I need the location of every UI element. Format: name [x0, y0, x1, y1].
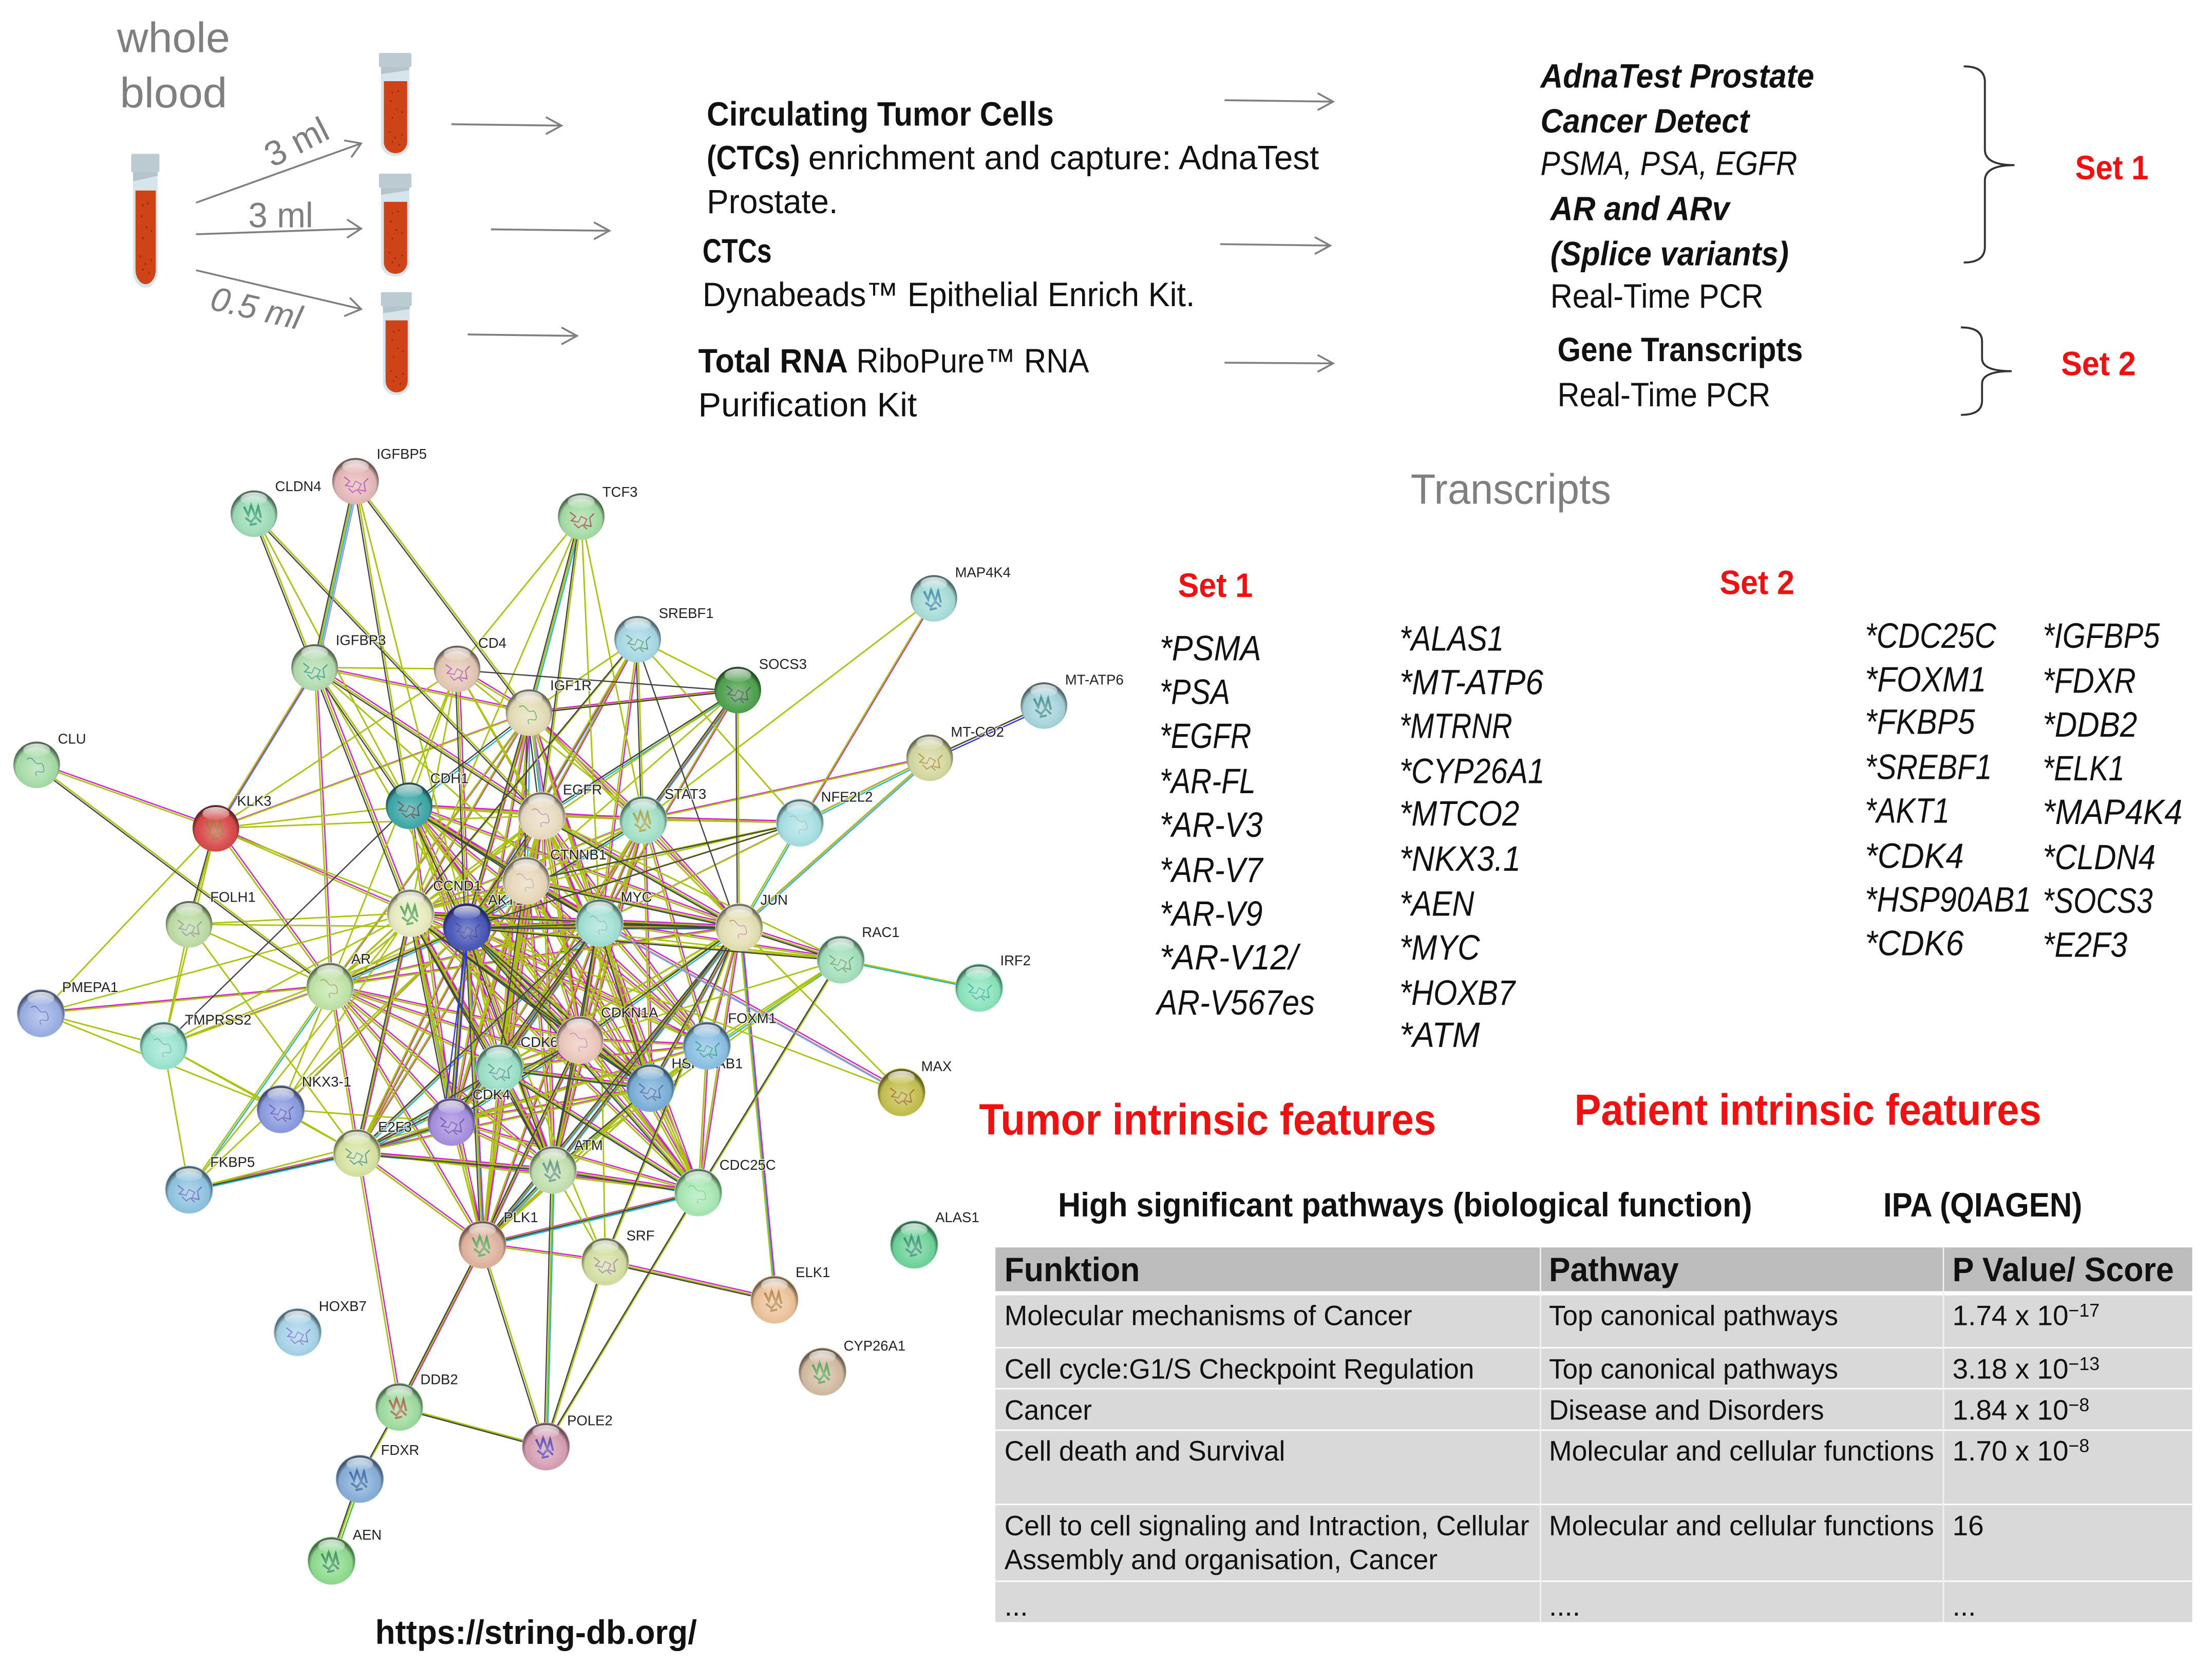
table column: function: Cell death and Survival: [1005, 1435, 1285, 1467]
node: TMPRSS2: TMPRSS2: [185, 1012, 252, 1027]
node: CDK6: CDK6: [521, 1034, 558, 1050]
text block: enrichment methods: Total RNA: [698, 342, 848, 380]
arrow: Dynabeads to PCR: [1220, 237, 1330, 254]
node: CLDN4: [231, 478, 322, 537]
table column: function: [1005, 1299, 1529, 1622]
node: RAC1: [817, 924, 900, 984]
table column: pathway: ....: [1549, 1590, 1580, 1622]
node: MYC: [576, 889, 652, 947]
list: set 2 transcripts column 1: *MTRNR: [1400, 706, 1513, 746]
list: set 2 transcripts column 1: [1400, 619, 1545, 1055]
node: FKBP5: FKBP5: [210, 1154, 255, 1170]
table column: function: Cell to cell signaling and Intraction, Cellular: [1005, 1510, 1529, 1542]
table column: function: ...: [1005, 1590, 1028, 1622]
list: set 2 transcripts column 1: *HOXB7: [1400, 973, 1517, 1013]
node: KLK3: [193, 793, 272, 852]
node: SREBF1: SREBF1: [659, 605, 714, 621]
node: CDK4: CDK4: [472, 1087, 510, 1102]
list: set 1 transcripts: *PSMA: [1160, 629, 1261, 668]
list: set 2 transcripts column 2: *CDK6: [1865, 924, 1964, 963]
list: set 1 transcripts: AR-V567es: [1155, 983, 1315, 1022]
node: ELK1: [750, 1264, 830, 1324]
node: SOCS3: [714, 656, 807, 714]
table header: Funktion: [1005, 1250, 1140, 1288]
list: set 2 transcripts column 1: *AEN: [1400, 884, 1474, 924]
list: set 2 transcripts column 2: *SREBF1: [1865, 747, 1992, 787]
list: set 2 transcripts column 2: *CDC25C: [1865, 616, 1996, 656]
table column: p value: 1.74 x 10: [1953, 1299, 2069, 1331]
node: PLK1: [459, 1209, 538, 1268]
node: HSP90AB1: [627, 1055, 743, 1112]
node: STAT3: STAT3: [665, 786, 706, 802]
list: set 1 transcripts: *AR-FL: [1160, 761, 1256, 801]
node: MYC: MYC: [621, 889, 652, 905]
table column: p value: 3.18 x 10: [1953, 1353, 2069, 1385]
list: set 2 transcripts column 1: *CYP26A1: [1400, 752, 1545, 791]
node: STAT3: [619, 786, 706, 844]
node: HOXB7: HOXB7: [319, 1298, 367, 1314]
arrow: AdnaTest to detect: [1224, 93, 1333, 110]
text block: detection methods: AdnaTest Prostate: [1540, 57, 1814, 95]
text block: enrichment methods: CTCs: [703, 232, 772, 270]
node: FKBP5: [165, 1154, 255, 1213]
node: TCF3: [558, 484, 638, 540]
list: set 2 transcripts column 2: *FKBP5: [1865, 702, 1975, 741]
node: IGF1R: IGF1R: [550, 677, 592, 693]
label: Set 1 top: Set 1: [2075, 148, 2148, 186]
brace: set 2: [1961, 327, 2012, 415]
node: PMEPA1: PMEPA1: [62, 979, 118, 995]
node: ALAS1: ALAS1: [935, 1209, 979, 1225]
node: MT-CO2: MT-CO2: [951, 724, 1004, 740]
node: CDK6: [476, 1034, 558, 1092]
node: IRF2: IRF2: [1000, 952, 1031, 968]
heading: pathways: High significant pathways (biological function): [1058, 1186, 1752, 1224]
list: set 2 transcripts column 1: *MYC: [1400, 928, 1480, 967]
arrow: 3 ml middle split: [196, 219, 361, 238]
node: RAC1: RAC1: [862, 924, 900, 940]
label: whole blood: blood: [120, 69, 227, 117]
text block: detection methods: Real-Time PCR: [1551, 277, 1764, 315]
arrow: tube 1 onward: [451, 117, 561, 134]
arrow: 0.5 ml lower split: [196, 270, 361, 316]
node: CDC25C: [674, 1157, 776, 1216]
node: CYP26A1: [799, 1338, 905, 1396]
list: set 2 transcripts column 2: *AKT1: [1865, 791, 1950, 830]
list: set 1 transcripts: *AR-V3: [1160, 805, 1262, 845]
node: KLK3: KLK3: [237, 793, 272, 809]
label: 0.5 ml: 0.5 ml: [207, 279, 307, 337]
node: MT-CO2: [906, 724, 1004, 781]
node: CCND1: CCND1: [433, 877, 482, 893]
node: CCND1: [387, 877, 482, 937]
node: NFE2L2: NFE2L2: [821, 789, 873, 804]
table header: [1005, 1250, 2174, 1288]
node: CD4: CD4: [478, 635, 506, 651]
node: CTNNB1: CTNNB1: [550, 847, 607, 863]
text block: enrichment methods: Dynabeads™ Epithelial Enrich Kit.: [703, 275, 1195, 313]
text block: detection methods: Gene Transcripts: [1557, 330, 1803, 368]
list: set 2 transcripts column 2: *FOXM1: [1865, 660, 1987, 699]
list: set 2 transcripts column 3: *MAP4K4: [2043, 792, 2182, 832]
node: FDXR: FDXR: [381, 1442, 419, 1458]
node: FOXM1: [683, 1010, 777, 1070]
table column: pathway: Molecular and cellular functions: [1549, 1435, 1934, 1467]
list: set 2 transcripts column 1: *MT-ATP6: [1400, 662, 1544, 702]
node: IGFBP5: [332, 446, 427, 504]
table column: p value: −17: [2069, 1300, 2100, 1321]
icon: tube 3: [381, 292, 412, 395]
node: FOXM1: FOXM1: [728, 1010, 777, 1026]
table column: p value: 16: [1953, 1510, 1984, 1542]
node: ATM: [529, 1137, 603, 1194]
table column: pathway: [1549, 1299, 1934, 1622]
node: IGF1R: [506, 677, 592, 736]
table header: Pathway: [1549, 1250, 1679, 1288]
node: HOXB7: [274, 1298, 367, 1356]
label: whole blood: whole: [117, 14, 230, 62]
list: set 1 transcripts: *EGFR: [1160, 716, 1251, 756]
node: MT-ATP6: MT-ATP6: [1065, 671, 1124, 687]
source url: https://string-db.org/: [375, 1613, 697, 1651]
node: DDB2: DDB2: [421, 1372, 458, 1388]
node: MAX: [878, 1058, 952, 1116]
table: pathways: [995, 1247, 2192, 1622]
node: TCF3: TCF3: [602, 484, 638, 500]
node: CDK4: [427, 1087, 510, 1146]
list: set 1 transcripts: *AR-V7: [1160, 850, 1264, 890]
node: ALAS1: [890, 1209, 979, 1268]
label: Set 1 list heading: Set 1: [1178, 566, 1253, 604]
node: CDKN1A: CDKN1A: [601, 1005, 658, 1021]
text block: enrichment methods: enrichment and capture: AdnaTest: [808, 139, 1319, 177]
node: DDB2: [375, 1372, 458, 1431]
table column: pathway: Disease and Disorders: [1549, 1394, 1824, 1426]
node: MAP4K4: MAP4K4: [955, 565, 1011, 581]
text block: detection methods: [1540, 57, 1814, 414]
heading: tumor intrinsic features: Tumor intrinsic features: [979, 1095, 1436, 1144]
text block: detection methods: (Splice variants): [1551, 234, 1789, 272]
node: CLU: [13, 731, 86, 788]
text block: detection methods: Cancer Detect: [1541, 102, 1751, 140]
node: AKT1: AKT1: [488, 892, 523, 908]
text block: enrichment methods: Prostate.: [707, 182, 838, 220]
heading: Transcripts: Transcripts: [1411, 466, 1611, 513]
text block: detection methods: AR and ARv: [1549, 190, 1731, 228]
text block: detection methods: Real-Time PCR: [1557, 376, 1770, 414]
node: TMPRSS2: [140, 1012, 252, 1070]
node: EGFR: EGFR: [563, 782, 602, 798]
node: E2F3: E2F3: [378, 1119, 412, 1135]
heading: patient intrinsic features: Patient intrinsic features: [1574, 1085, 2041, 1134]
node: CTNNB1: [502, 847, 607, 905]
node: CDKN1A: [556, 1005, 658, 1064]
label: 3 ml rotated: 3 ml: [258, 109, 335, 175]
node: IRF2: [955, 952, 1031, 1012]
table header: P Value/ Score: [1953, 1250, 2174, 1288]
label: 3 ml: 3 ml: [248, 195, 313, 235]
node: CDC25C: CDC25C: [720, 1157, 776, 1173]
text block: enrichment methods: RiboPure™ RNA: [856, 342, 1089, 380]
list: set 2 transcripts column 2: *CDK4: [1865, 836, 1964, 875]
arrow: tube 3 onward: [468, 327, 577, 344]
node: IGFBP3: [291, 632, 386, 691]
table column: p value: −13: [2069, 1354, 2100, 1374]
node: AR: AR: [351, 951, 371, 967]
node: ELK1: ELK1: [796, 1264, 830, 1280]
list: set 2 transcripts column 3: *SOCS3: [2043, 881, 2153, 921]
node: CLU: CLU: [58, 731, 86, 747]
table column: pathway: Molecular and cellular functions: [1549, 1510, 1934, 1542]
node: HSP90AB1: HSP90AB1: [671, 1055, 743, 1071]
edges: [35, 481, 1045, 1562]
node: E2F3: [333, 1119, 412, 1177]
list: set 1 transcripts: [1155, 629, 1315, 1022]
label: Set 2 top: Set 2: [2061, 345, 2136, 383]
list: set 2 transcripts column 1: *MTCO2: [1400, 794, 1519, 833]
brace: set 1: [1964, 66, 2014, 263]
arrow: RNA to gene transcripts: [1224, 355, 1333, 372]
node: CDH1: CDH1: [430, 771, 469, 787]
arrow: tube 2 onward: [491, 222, 610, 239]
text block: enrichment methods: (CTCs): [707, 139, 800, 177]
node: PMEPA1: [17, 979, 118, 1037]
node: NFE2L2: [776, 789, 873, 847]
node: CYP26A1: CYP26A1: [844, 1338, 905, 1354]
node: IGFBP3: IGFBP3: [336, 632, 386, 648]
list: set 2 transcripts column 3: *DDB2: [2043, 705, 2137, 744]
node: AEN: AEN: [353, 1527, 382, 1543]
node: POLE2: [522, 1412, 613, 1470]
network chart: STRING protein interactions: [13, 446, 1124, 1585]
list: set 2 transcripts column 3: *E2F3: [2043, 925, 2127, 964]
node: CLDN4: CLDN4: [275, 478, 322, 494]
node: MAX: MAX: [921, 1058, 952, 1074]
list: set 2 transcripts column 1: *ATM: [1400, 1015, 1480, 1055]
table column: p value: ...: [1953, 1590, 1976, 1622]
text block: enrichment methods: Circulating Tumor Cells: [707, 95, 1054, 133]
node: SREBF1: [614, 605, 714, 663]
node: CDH1: [386, 771, 469, 829]
node: EGFR: [518, 782, 602, 839]
list: set 2 transcripts column 3: [2043, 616, 2182, 964]
list: set 2 transcripts column 2: *HSP90AB1: [1865, 879, 2031, 919]
node: FOLH1: FOLH1: [210, 889, 256, 905]
list: set 2 transcripts column 3: *ELK1: [2043, 748, 2125, 788]
node: PLK1: PLK1: [504, 1209, 538, 1225]
node: AEN: [308, 1527, 382, 1585]
list: set 1 transcripts: *AR-V9: [1160, 894, 1262, 933]
table column: p value: [1953, 1299, 2100, 1622]
node: SOCS3: SOCS3: [759, 656, 807, 672]
node: POLE2: POLE2: [567, 1412, 613, 1428]
node: NKX3-1: NKX3-1: [302, 1074, 351, 1090]
icon: tube 2: [379, 174, 411, 276]
node: FOLH1: [166, 889, 256, 948]
table column: function: Cell cycle:G1/S Checkpoint Regulation: [1005, 1353, 1474, 1385]
icon: whole blood tube: [131, 154, 159, 288]
label: Set 2 list heading: Set 2: [1719, 563, 1794, 601]
table column: function: Assembly and organisation, Cancer: [1005, 1544, 1438, 1576]
node: AR: [306, 951, 371, 1010]
node: IGFBP5: IGFBP5: [376, 446, 427, 462]
text block: enrichment methods: [698, 95, 1319, 423]
text block: enrichment methods: Purification Kit: [698, 385, 917, 423]
node: NKX3-1: [257, 1074, 351, 1133]
list: set 1 transcripts: *PSA: [1160, 672, 1230, 712]
table column: pathway: Top canonical pathways: [1549, 1353, 1838, 1385]
table column: p value: −8: [2069, 1436, 2089, 1456]
node: JUN: JUN: [761, 892, 788, 908]
list: set 1 transcripts: *AR-V12/: [1160, 938, 1301, 977]
node: SRF: SRF: [627, 1228, 655, 1244]
node: AKT1: [443, 892, 523, 951]
list: set 2 transcripts column 1: *NKX3.1: [1400, 839, 1521, 878]
label: whole blood: [117, 14, 230, 117]
table column: p value: 1.84 x 10: [1953, 1394, 2069, 1426]
table column: p value: −8: [2069, 1395, 2089, 1415]
text block: detection methods: PSMA, PSA, EGFR: [1541, 144, 1797, 182]
node: ATM: ATM: [574, 1137, 603, 1153]
table column: p value: 1.70 x 10: [1953, 1435, 2069, 1467]
table column: function: Molecular mechanisms of Cancer: [1005, 1299, 1412, 1331]
list: set 2 transcripts column 1: *ALAS1: [1400, 619, 1504, 658]
list: set 2 transcripts column 2: [1865, 616, 2031, 963]
arrow: 3 ml upper split: [196, 140, 361, 202]
table column: function: Cancer: [1005, 1394, 1092, 1426]
list: set 2 transcripts column 3: *IGFBP5: [2043, 616, 2160, 656]
table column: pathway: Top canonical pathways: [1549, 1299, 1838, 1331]
node: JUN: [715, 892, 788, 951]
node: SRF: [581, 1228, 655, 1285]
node: FDXR: [336, 1442, 419, 1503]
list: set 2 transcripts column 3: *CLDN4: [2043, 837, 2156, 877]
icon: tube 1: [379, 53, 411, 156]
node: MT-ATP6: [1020, 671, 1124, 729]
heading: IPA: IPA (QIAGEN): [1883, 1186, 2082, 1224]
list: set 2 transcripts column 3: *FDXR: [2043, 661, 2136, 701]
node: CD4: [434, 635, 506, 692]
node: MAP4K4: [911, 565, 1011, 622]
